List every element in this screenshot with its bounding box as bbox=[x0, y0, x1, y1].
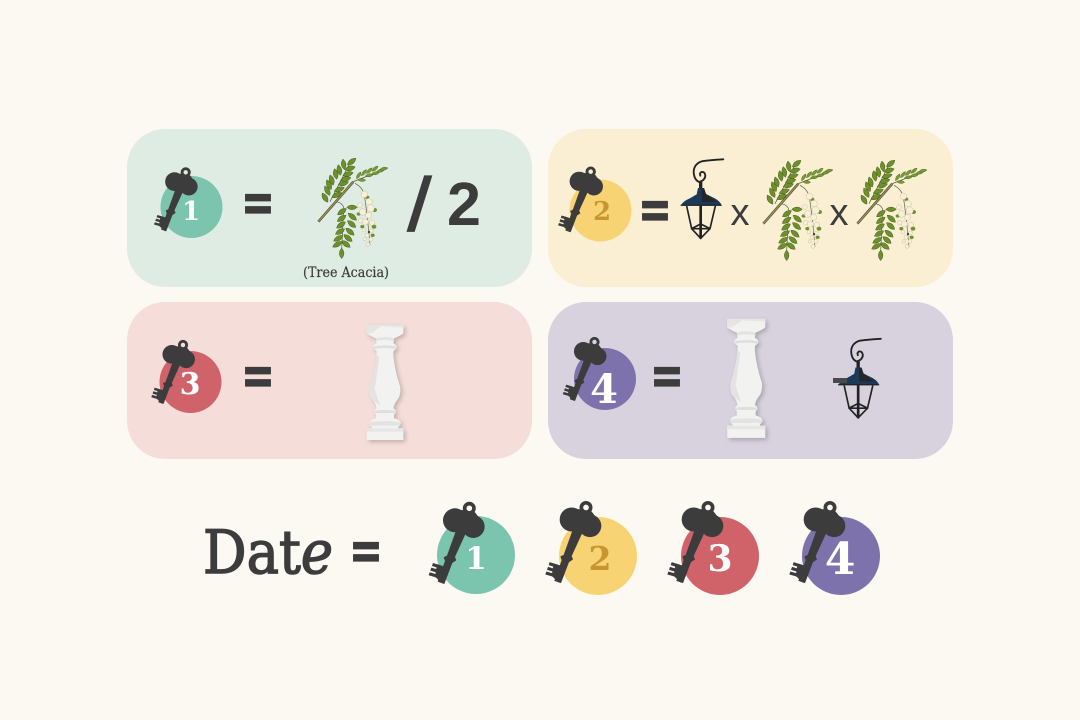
divide by two: / bbox=[407, 163, 432, 242]
icon: baluster bbox=[367, 325, 403, 440]
multiply sign: x bbox=[730, 192, 750, 234]
badge: big 1: 1 bbox=[465, 541, 487, 577]
icon: lantern bbox=[681, 159, 723, 239]
equals sign: = bbox=[638, 179, 672, 242]
badge: big 1 bbox=[429, 504, 515, 594]
panel: clue 1 bbox=[127, 129, 532, 287]
caption: tree acacia: (Tree Acacia) bbox=[303, 265, 389, 281]
badge: circle number 4: 4 bbox=[590, 366, 618, 413]
divide by two: 2 bbox=[447, 170, 481, 238]
badge: big 4 bbox=[789, 503, 880, 595]
badge: circle number 1 bbox=[154, 169, 222, 238]
equals sign: = bbox=[241, 172, 275, 235]
equals sign: = bbox=[349, 520, 383, 583]
divide by two bbox=[407, 163, 481, 242]
badge: circle number 3: 3 bbox=[180, 367, 200, 402]
badge: circle number 1: 1 bbox=[182, 197, 200, 227]
heading: date: Date bbox=[203, 518, 333, 588]
badge: circle number 4 bbox=[563, 338, 636, 413]
icon: tree acacia bbox=[763, 159, 833, 261]
icon: baluster bbox=[727, 319, 765, 438]
equals sign: = bbox=[241, 345, 275, 408]
panel: clue 3 bbox=[127, 302, 532, 459]
badge: circle number 2 bbox=[558, 168, 632, 242]
badge: big 3: 3 bbox=[707, 538, 733, 580]
badge: big 4: 4 bbox=[825, 534, 855, 585]
badge: big 3 bbox=[667, 503, 759, 595]
equation: date bbox=[203, 503, 880, 595]
badge: circle number 2: 2 bbox=[593, 197, 611, 227]
equals sign: = bbox=[650, 345, 684, 408]
icon: tree acacia bbox=[318, 157, 388, 259]
panel: clue 2 bbox=[548, 129, 953, 287]
panel: clue 4 bbox=[548, 302, 953, 459]
multiply sign: x bbox=[830, 192, 848, 234]
badge: big 2 bbox=[545, 503, 637, 595]
icon: lantern bbox=[833, 339, 881, 418]
badge: big 2: 2 bbox=[589, 539, 611, 578]
icon: tree acacia bbox=[857, 159, 927, 261]
badge: circle number 3 bbox=[151, 341, 222, 413]
